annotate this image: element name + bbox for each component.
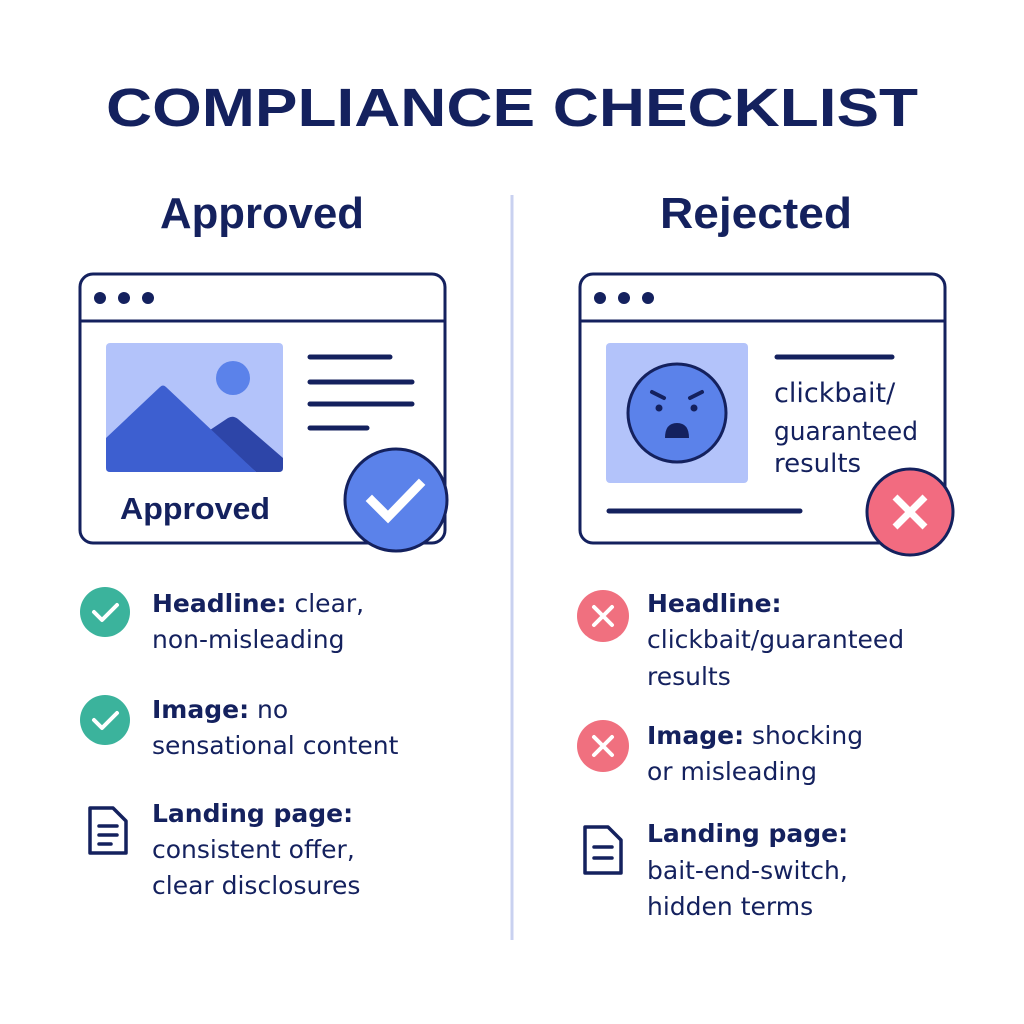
icon: approved check badge: [345, 449, 447, 551]
text: landing page: Landing page:: [647, 819, 848, 848]
icon: x image: [577, 720, 629, 772]
list: rejected criteria: [577, 589, 904, 921]
text: headline: results: [647, 662, 731, 691]
icon: rejected x badge: [867, 469, 953, 555]
text: headline: clickbait/guaranteed: [647, 625, 904, 654]
panel: approved browser mockup: Approved: [120, 491, 270, 526]
text: image: Image: shocking: [647, 721, 863, 750]
text: headline: non-misleading: [152, 625, 345, 654]
icon: check image: [80, 695, 130, 745]
list: approved criteria: [80, 587, 399, 900]
image placeholder: [106, 343, 283, 472]
title: COMPLIANCE CHECKLIST: [106, 78, 918, 138]
text: image: Image: no: [152, 695, 288, 724]
heading: approved: Approved: [160, 189, 364, 238]
text: headline: Headline: clear,: [152, 589, 364, 618]
text: landing page: consistent offer,: [152, 835, 355, 864]
text: landing page: clear disclosures: [152, 871, 360, 900]
text: image: or misleading: [647, 757, 817, 786]
heading: rejected: Rejected: [660, 189, 852, 238]
text: landing page: bait-end-switch,: [647, 856, 848, 885]
icon: x headline: [577, 590, 629, 642]
text: headline: Headline:: [647, 589, 782, 618]
text: image: sensational content: [152, 731, 399, 760]
panel: rejected browser mockup: results: [774, 449, 861, 479]
panel: rejected browser mockup: [580, 274, 945, 543]
panel: approved browser mockup: [80, 274, 445, 543]
icon: check headline: [80, 587, 130, 637]
panel: rejected browser mockup: clickbait/: [774, 378, 896, 409]
image: angry face: [606, 343, 748, 483]
icon: document: [90, 808, 126, 853]
text: landing page: Landing page:: [152, 799, 353, 828]
text: landing page: hidden terms: [647, 892, 813, 921]
panel: rejected browser mockup: guaranteed: [774, 417, 918, 447]
icon: document: [585, 827, 621, 873]
